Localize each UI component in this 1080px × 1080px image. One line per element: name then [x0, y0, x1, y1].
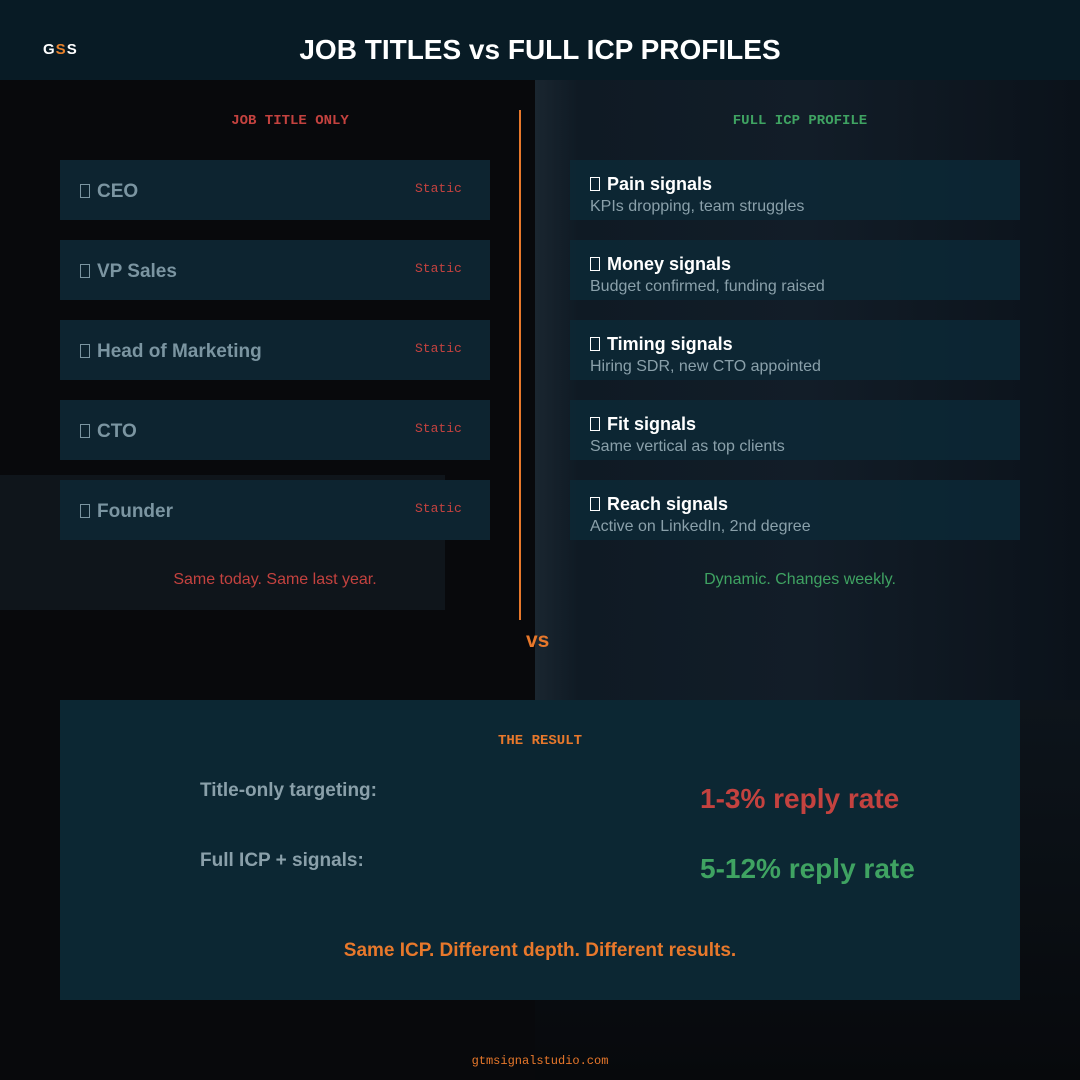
card: CEO [60, 160, 490, 220]
card: Head of Marketing: Head of Marketing [97, 341, 262, 362]
result panel: 5-12% reply rate [700, 853, 915, 884]
footer: gtmsignalstudio.com [472, 1054, 608, 1068]
card: Reach: Active on LinkedIn, 2nd degree [590, 518, 811, 535]
card: CTO: Static [415, 421, 462, 436]
card: VP Sales: Static [415, 261, 462, 276]
row 2: Full ICP + signals: [200, 850, 364, 871]
title: JOB TITLES vs FULL ICP PROFILES [299, 34, 781, 65]
vs label: vs [526, 629, 549, 652]
right caption: Dynamic. Changes weekly. [704, 571, 896, 588]
card: Money: Budget confirmed, funding raised [590, 278, 825, 295]
heading right: FULL ICP PROFILE [733, 113, 867, 129]
card: Reach: Reach signals [607, 494, 728, 514]
heading left: JOB TITLE ONLY [231, 113, 349, 129]
card: Founder: Static [415, 501, 462, 516]
card: Timing: Timing signals [607, 334, 733, 354]
card: Head of Marketing [60, 320, 490, 380]
card: Timing [570, 320, 1020, 380]
card: CTO [60, 400, 490, 460]
card: Fit: Same vertical as top clients [590, 438, 785, 455]
card: Fit [570, 400, 1020, 460]
card: Fit: Fit signals [607, 414, 696, 434]
card: Founder [60, 480, 490, 540]
left caption: Same today. Same last year. [173, 571, 377, 588]
card: CTO: CTO [97, 421, 137, 442]
card: Timing: Hiring SDR, new CTO appointed [590, 358, 821, 375]
card: Pain [570, 160, 1020, 220]
card: Pain: KPIs dropping, team struggles [590, 198, 804, 215]
card: VP Sales: VP Sales [97, 261, 177, 282]
divider line [519, 110, 521, 620]
row 1: Title-only targeting: [200, 780, 377, 801]
card: Money [570, 240, 1020, 300]
card: Founder: Founder [97, 501, 173, 522]
card: CEO: CEO [97, 181, 138, 202]
card: Money: Money signals [607, 254, 731, 274]
card: CEO: Static [415, 181, 462, 196]
background texture right [535, 80, 1080, 700]
card: VP Sales [60, 240, 490, 300]
result panel [60, 700, 1020, 1000]
result heading: THE RESULT [498, 733, 582, 749]
result panel: 1-3% reply rate [700, 783, 899, 814]
logo: GSS [43, 41, 78, 58]
card: Pain: Pain signals [607, 174, 712, 194]
card: Head of Marketing: Static [415, 341, 462, 356]
tagline: Same ICP. Different depth. Different results. [344, 940, 736, 961]
header [0, 0, 1080, 80]
card: Reach [570, 480, 1020, 540]
